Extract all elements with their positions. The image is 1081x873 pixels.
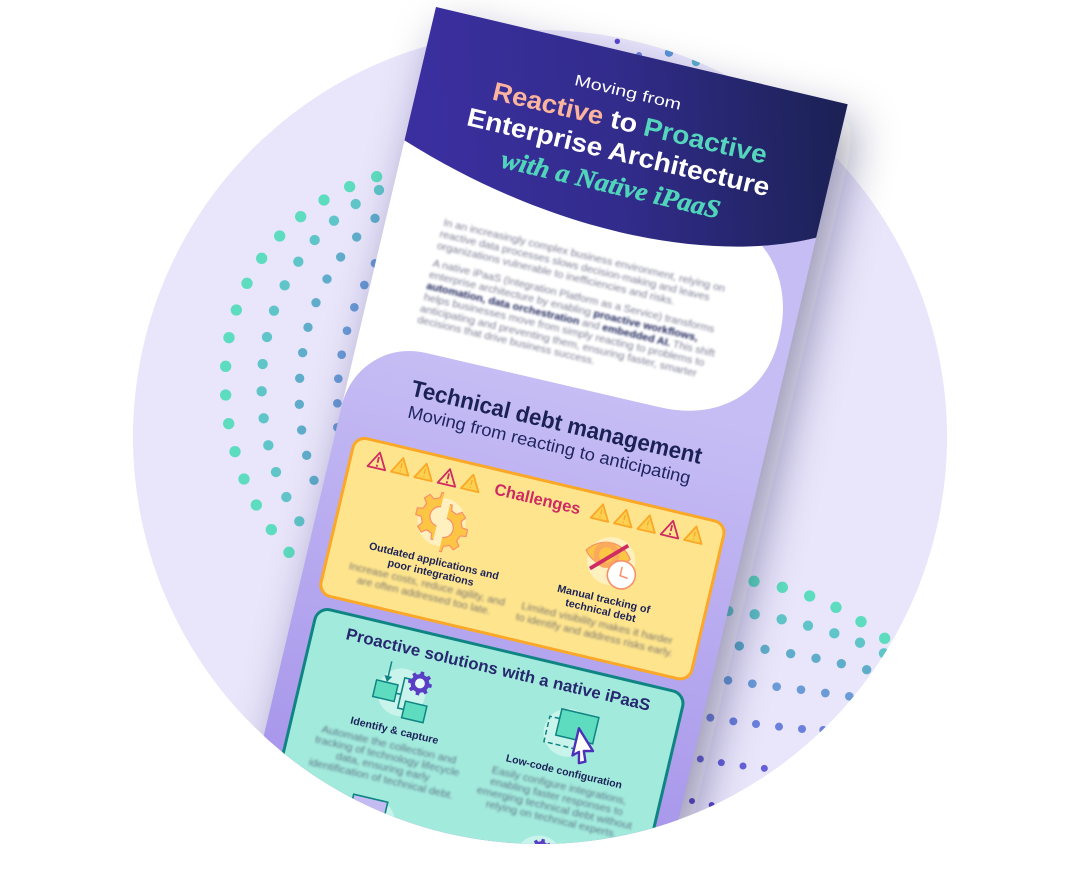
intro text (blurred) xyxy=(416,218,726,377)
intro text (blurred): automation, data orchestration and embedded AI. This shift xyxy=(425,280,716,360)
intro text (blurred): enterprise architecture by enabling proactive workflows, xyxy=(428,269,699,344)
icon: low-code configuration xyxy=(543,708,600,764)
item text (blurred): low-code configuration: Easily configure integrations, xyxy=(491,764,628,807)
item text (blurred): identify and capture: identification of technical debt. xyxy=(308,756,454,802)
item text (blurred): low-code configuration: enabling faster responses to xyxy=(489,775,624,818)
intro text (blurred): In an increasingly complex business environment, relying on xyxy=(442,217,726,295)
item text (blurred): identify and capture: Automate the collection and xyxy=(320,723,458,767)
icon: broken gear xyxy=(415,492,468,552)
heading: Challenges: Challenges xyxy=(493,481,582,518)
item title: identify and capture: Identify & capture xyxy=(349,715,440,747)
title line: Enterprise Architecture: Enterprise Architecture xyxy=(464,102,773,202)
intro text (blurred): A native iPaaS (Integration Platform as a Service) transforms xyxy=(432,257,716,336)
intro white panel xyxy=(342,124,783,411)
item text (blurred): outdated applications: are often addressed too late. xyxy=(356,574,492,618)
item text (blurred): identify and capture: data, ensuring early xyxy=(335,750,432,784)
section subheading: Moving from reacting to anticipating xyxy=(406,402,693,488)
item text (blurred): low-code configuration: relying on technical experts. xyxy=(485,798,618,841)
intro text (blurred): organizations vulnerable to inefficiencies and risks. xyxy=(436,240,676,308)
intro text (blurred): anticipating and preventing them, ensuring faster, smarter xyxy=(419,303,699,380)
intro text (blurred): decisions that drive business success. xyxy=(416,314,596,367)
panel: challenges xyxy=(318,436,726,681)
item title: manual tracking: technical debt xyxy=(564,597,637,625)
item text (blurred): outdated applications: Increase costs, reduce agility, and xyxy=(348,560,506,609)
title xyxy=(468,74,768,218)
panel: proactive solutions xyxy=(282,608,684,844)
icon: partially hidden monitoring screen xyxy=(352,793,394,817)
tilted infographic page xyxy=(237,7,857,866)
item title: outdated applications: Outdated applications and xyxy=(368,540,500,583)
item title: low-code configuration: Low-code configuration xyxy=(505,752,623,791)
icon: identify and capture xyxy=(369,659,435,723)
background circle xyxy=(133,30,947,844)
title line: Moving from: Moving from xyxy=(573,72,683,114)
item text (blurred): identify and capture: tracking of technology lifecycle xyxy=(314,734,461,779)
icons: warning triangles left xyxy=(368,450,482,492)
icons: warning triangles right xyxy=(591,502,705,544)
icon: partially hidden gear xyxy=(521,836,556,844)
title word: Reactive: Reactive xyxy=(490,76,607,131)
item text (blurred): manual tracking: Limited visibility makes it harder xyxy=(520,600,674,647)
title line: with a Native iPaaS: with a Native iPaaS xyxy=(499,145,723,224)
proactive solutions content xyxy=(308,624,662,844)
item title: manual tracking: Manual tracking of xyxy=(556,583,652,616)
section heading: Technical debt management xyxy=(409,375,705,469)
heading: proactive solutions: Proactive solutions with a native iPaaS xyxy=(344,625,652,715)
page body xyxy=(237,7,848,850)
header banner xyxy=(404,7,848,247)
item text (blurred): low-code configuration xyxy=(476,765,633,838)
item title: outdated applications: poor integrations xyxy=(386,557,475,589)
item text (blurred): low-code configuration: emerging technical debt without xyxy=(476,784,633,832)
title word: to: to xyxy=(608,104,641,139)
item text (blurred): manual tracking: to identify and address risks early. xyxy=(514,611,674,660)
intro text (blurred): helps businesses move from simply reacting to problems to xyxy=(423,291,706,369)
intro text (blurred): reactive data processes slows decision-making and leaves xyxy=(439,228,711,304)
icon: crossed-out eye with clock xyxy=(586,537,636,590)
page upper content xyxy=(298,7,848,686)
decorative dot pattern xyxy=(220,39,890,808)
item text (blurred): identify and capture xyxy=(308,722,463,802)
title word: Proactive: Proactive xyxy=(641,111,770,170)
page drop shadow xyxy=(252,28,857,847)
